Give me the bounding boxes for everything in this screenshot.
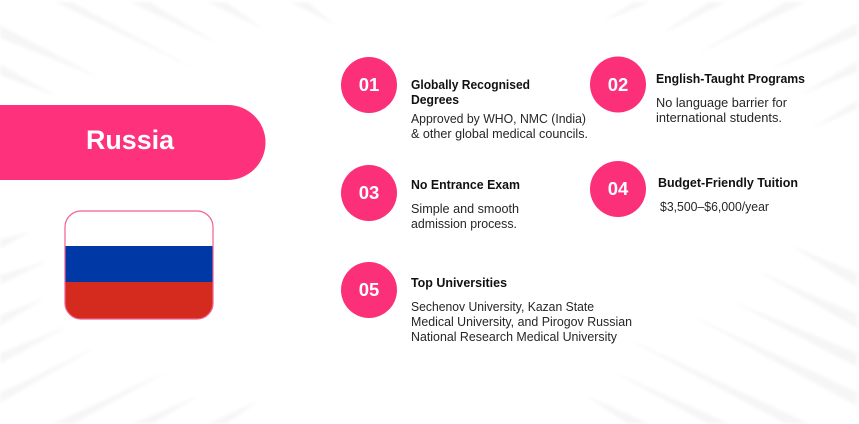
badge 01: 01 — [359, 74, 379, 95]
badge 03 — [341, 165, 397, 221]
description 01: & other global medical councils. — [411, 126, 588, 141]
description 05: National Research Medical University — [411, 329, 617, 344]
icon: Russian flag — [65, 211, 213, 319]
heading 04: Budget-Friendly Tuition — [658, 175, 798, 190]
badge 01 — [341, 57, 397, 113]
badge 03: 03 — [359, 182, 379, 203]
description 01: Approved by WHO, NMC (India) — [411, 111, 586, 126]
item 05: Top Universities — [341, 262, 632, 344]
heading 03: No Entrance Exam — [411, 177, 520, 192]
description 02: No language barrier for — [656, 95, 788, 110]
heading 05: Top Universities — [411, 275, 507, 290]
heading 01 — [411, 77, 530, 107]
badge 02: 02 — [608, 74, 628, 95]
description 05: Sechenov University, Kazan State — [411, 299, 594, 314]
description 05: Medical University, and Pirogov Russian — [411, 314, 632, 329]
title banner: Russia — [0, 105, 266, 180]
description 03 — [411, 201, 519, 231]
item 02: English-Taught Programs — [590, 56, 805, 125]
description 03: Simple and smooth — [411, 201, 519, 216]
description 02 — [656, 95, 788, 125]
description 04: $3,500–$6,000/year — [660, 199, 770, 214]
heading 01: Degrees — [411, 92, 459, 107]
heading 01: Globally Recognised — [411, 77, 530, 92]
badge 02 — [590, 56, 646, 112]
badge 04: 04 — [608, 178, 629, 199]
title banner: Russia: Russia — [86, 125, 175, 155]
description 01 — [411, 111, 588, 141]
badge 04 — [590, 161, 646, 217]
description 03: admission process. — [411, 216, 517, 231]
item 01: Globally Recognised Degrees — [341, 57, 588, 141]
heading 02: English-Taught Programs — [656, 71, 805, 86]
item 04: Budget-Friendly Tuition — [590, 161, 798, 217]
badge 05 — [341, 262, 397, 318]
badge 05: 05 — [359, 279, 379, 300]
description 02: international students. — [656, 110, 782, 125]
description 05 — [411, 299, 632, 344]
item 03: No Entrance Exam — [341, 165, 520, 231]
